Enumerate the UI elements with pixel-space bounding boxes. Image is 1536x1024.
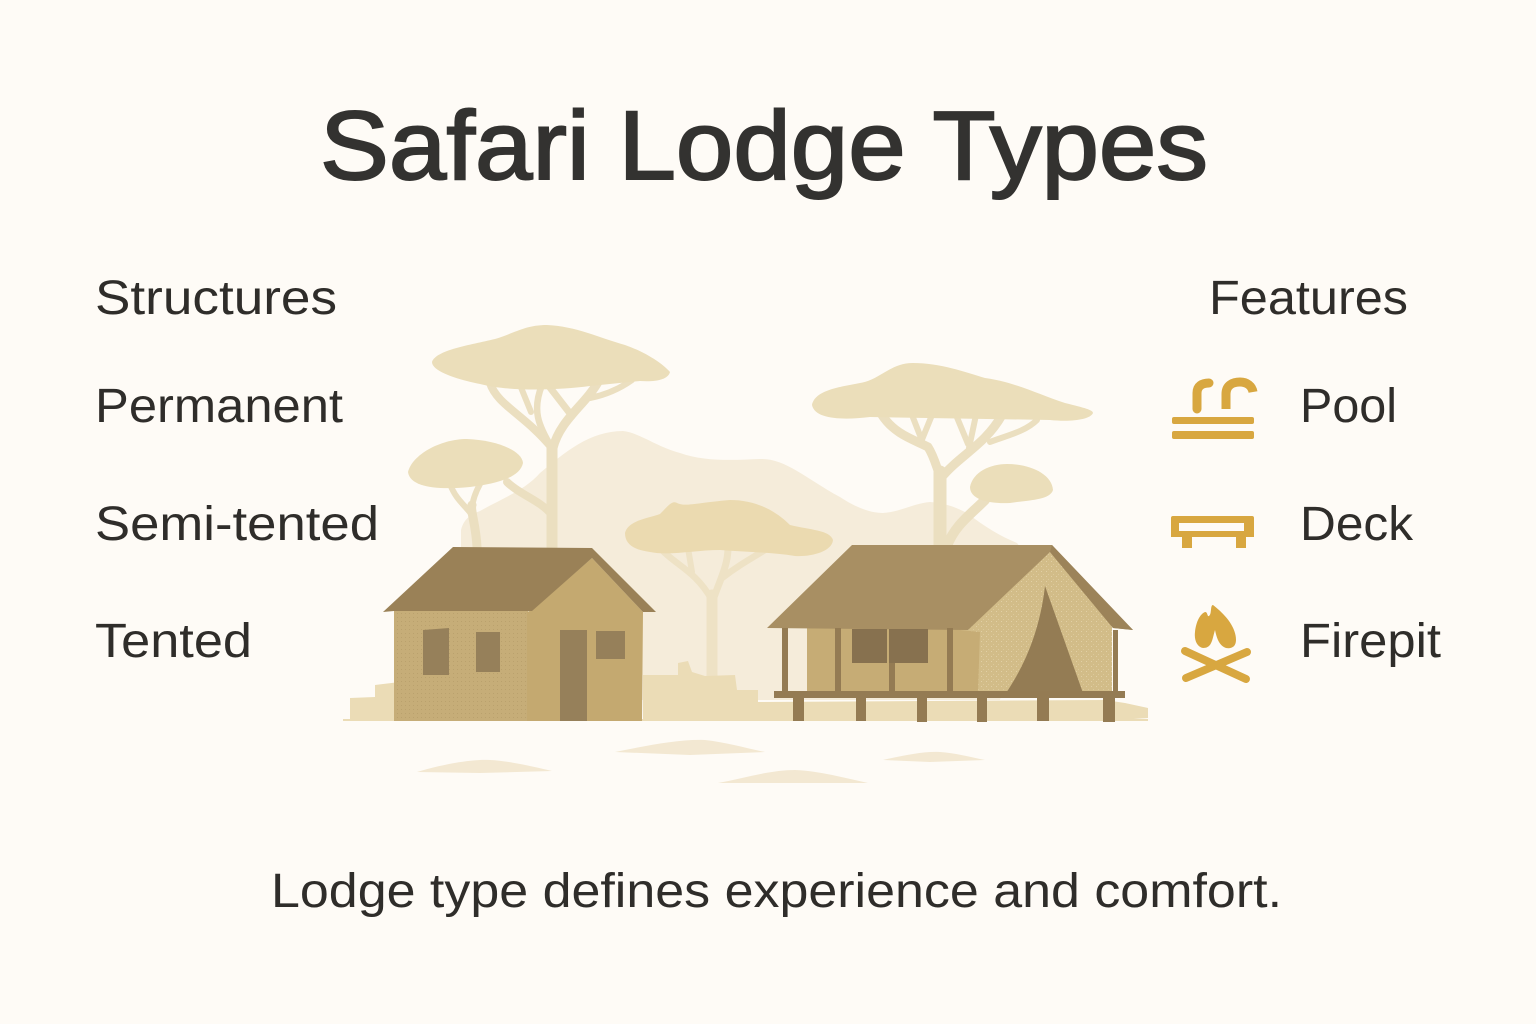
icon: deck xyxy=(1171,516,1254,548)
heading: structures: Structures xyxy=(95,272,337,325)
icon: firepit xyxy=(1185,605,1247,679)
roof xyxy=(767,545,1133,630)
tree: large left acacia xyxy=(432,325,670,548)
heading: features: Features xyxy=(1209,272,1408,325)
tree: small right acacia xyxy=(947,464,1053,546)
shrubs and ground band xyxy=(343,661,1148,721)
panel: central illustration xyxy=(343,325,1148,783)
label: semi-tented: Semi-tented xyxy=(95,498,379,551)
label: firepit: Firepit xyxy=(1300,615,1441,668)
tent windows xyxy=(852,629,928,663)
label: permanent: Permanent xyxy=(95,380,343,433)
permanent lodge house xyxy=(383,547,656,721)
panel: structures list xyxy=(95,272,379,668)
stilts xyxy=(793,695,1115,722)
tent door xyxy=(1006,586,1083,693)
ground mounds xyxy=(417,740,985,783)
panel: features list xyxy=(1171,272,1441,679)
platform xyxy=(774,691,1125,698)
title: Safari Lodge Types xyxy=(320,91,1208,200)
windows and door xyxy=(423,628,625,721)
semi-tented lodge on stilts xyxy=(767,545,1133,722)
tree: middle acacia xyxy=(625,500,833,680)
label: deck: Deck xyxy=(1300,498,1414,551)
posts xyxy=(782,628,1118,692)
label: tented: Tented xyxy=(95,615,252,668)
tree: small left acacia xyxy=(408,439,523,547)
hills xyxy=(461,431,1030,700)
caption: Lodge type defines experience and comfort. xyxy=(271,865,1282,918)
icon: pool xyxy=(1172,382,1254,439)
tree: large right acacia xyxy=(812,363,1093,546)
label: pool: Pool xyxy=(1300,380,1397,433)
